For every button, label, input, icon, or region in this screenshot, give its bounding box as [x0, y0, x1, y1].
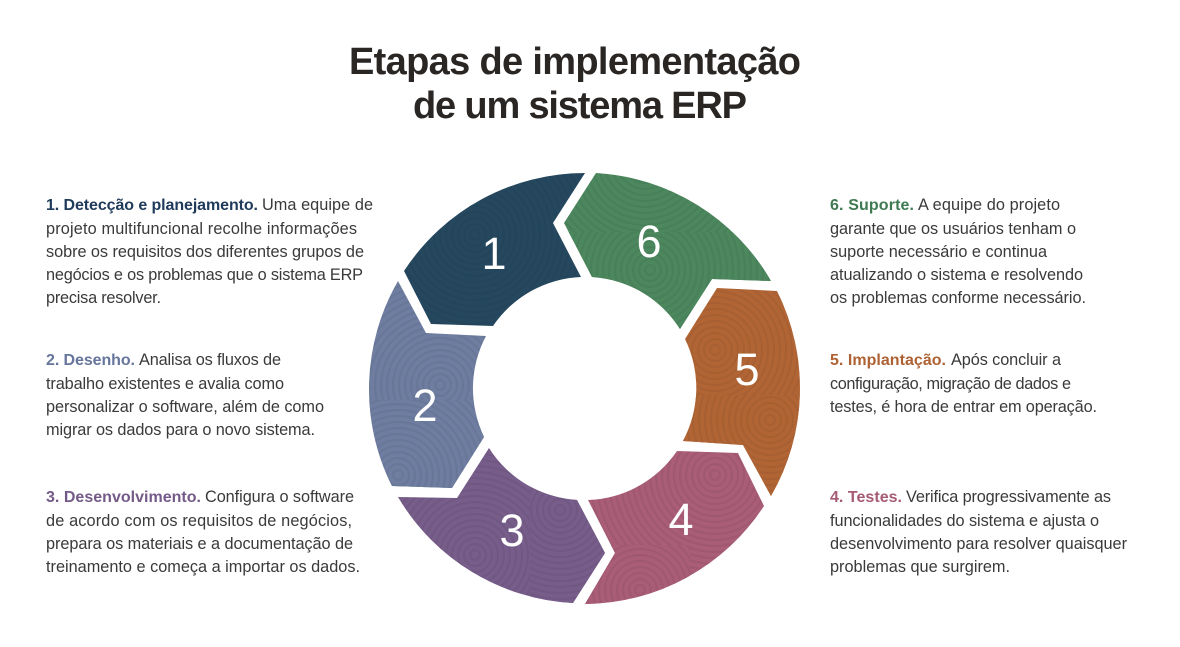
body: step 3: [46, 488, 360, 576]
body: step 6: [830, 196, 1086, 307]
text block: step 1: [46, 196, 373, 307]
cycle diagram: [360, 160, 805, 610]
heading: step 4: 4. Testes.: [830, 489, 902, 506]
number 2: 2: [412, 380, 438, 431]
body: step 2: [46, 351, 324, 439]
body: step 4: Verifica progressivamente as: [906, 488, 1111, 506]
text block: step 5: [830, 351, 1097, 416]
text block: step 3: [46, 488, 360, 576]
text block: step 4: [830, 488, 1128, 576]
segment 1: [404, 173, 585, 326]
body: step 1: projeto multifuncional recolhe informações: [46, 220, 357, 238]
segment 6: [560, 170, 775, 335]
body: step 1: [46, 196, 373, 307]
infographic canvas: [46, 46, 1127, 604]
body: step 5: [830, 351, 1097, 416]
heading: step 2: 2. Desenho.: [46, 352, 135, 369]
body: step 6: A equipe do projeto: [918, 196, 1060, 214]
number 1: 1: [481, 228, 507, 279]
segment 5: [680, 285, 805, 500]
title: de um sistema ERP: [413, 85, 747, 127]
body: step 6: os problemas conforme necessário.: [830, 289, 1086, 307]
text block: step 6: [830, 196, 1086, 307]
body: step 4: problemas que surgirem.: [830, 558, 1010, 576]
body: step 4: funcionalidades do sistema e ajusta o: [830, 512, 1099, 530]
body: step 3: treinamento e começa a importar os dados.: [46, 558, 360, 576]
body: step 5: Após concluir a: [951, 351, 1062, 369]
body: step 5: testes, é hora de entrar em operação.: [830, 398, 1097, 416]
body: step 1: Uma equipe de: [262, 196, 373, 214]
body: step 3: Configura o software: [205, 488, 354, 506]
text block: step 2: [46, 351, 324, 439]
body: step 6: garante que os usuários tenham o: [830, 220, 1076, 238]
body: step 6: atualizando o sistema e resolvendo: [830, 266, 1083, 284]
heading: step 3: 3. Desenvolvimento.: [46, 489, 201, 506]
segment 3: [398, 448, 605, 603]
title: Etapas de implementação: [349, 41, 801, 83]
body: step 2: migrar os dados para o novo sistema.: [46, 421, 315, 439]
body: step 4: [830, 488, 1128, 576]
heading: step 1: 1. Detecção e planejamento.: [46, 197, 258, 214]
title: [349, 41, 801, 127]
body: step 6: suporte necessário e continua: [830, 243, 1048, 261]
body: step 1: sobre os requisitos dos diferentes grupos de: [46, 243, 364, 261]
segment 4: [585, 451, 764, 604]
body: step 1: negócios e os problemas que o sistema ERP: [46, 266, 363, 284]
number 4: 4: [668, 494, 694, 545]
body: step 2: trabalho existentes e avalia como: [46, 375, 284, 393]
number 3: 3: [499, 505, 525, 556]
heading: step 5: 5. Implantação.: [830, 352, 946, 369]
body: step 3: de acordo com os requisitos de negócios,: [46, 512, 352, 530]
segment 2: [369, 281, 486, 488]
heading: step 6: 6. Suporte.: [830, 197, 914, 214]
body: step 2: Analisa os fluxos de: [139, 351, 281, 369]
number 6: 6: [636, 216, 662, 267]
number 5: 5: [734, 344, 760, 395]
body: step 4: desenvolvimento para resolver quaisquer: [830, 535, 1128, 553]
body: step 1: precisa resolver.: [46, 289, 161, 307]
body: step 3: prepara os materiais e a documentação de: [46, 535, 353, 553]
body: step 2: personalizar o software, além de como: [46, 398, 324, 416]
body: step 5: configuração, migração de dados e: [830, 375, 1071, 393]
